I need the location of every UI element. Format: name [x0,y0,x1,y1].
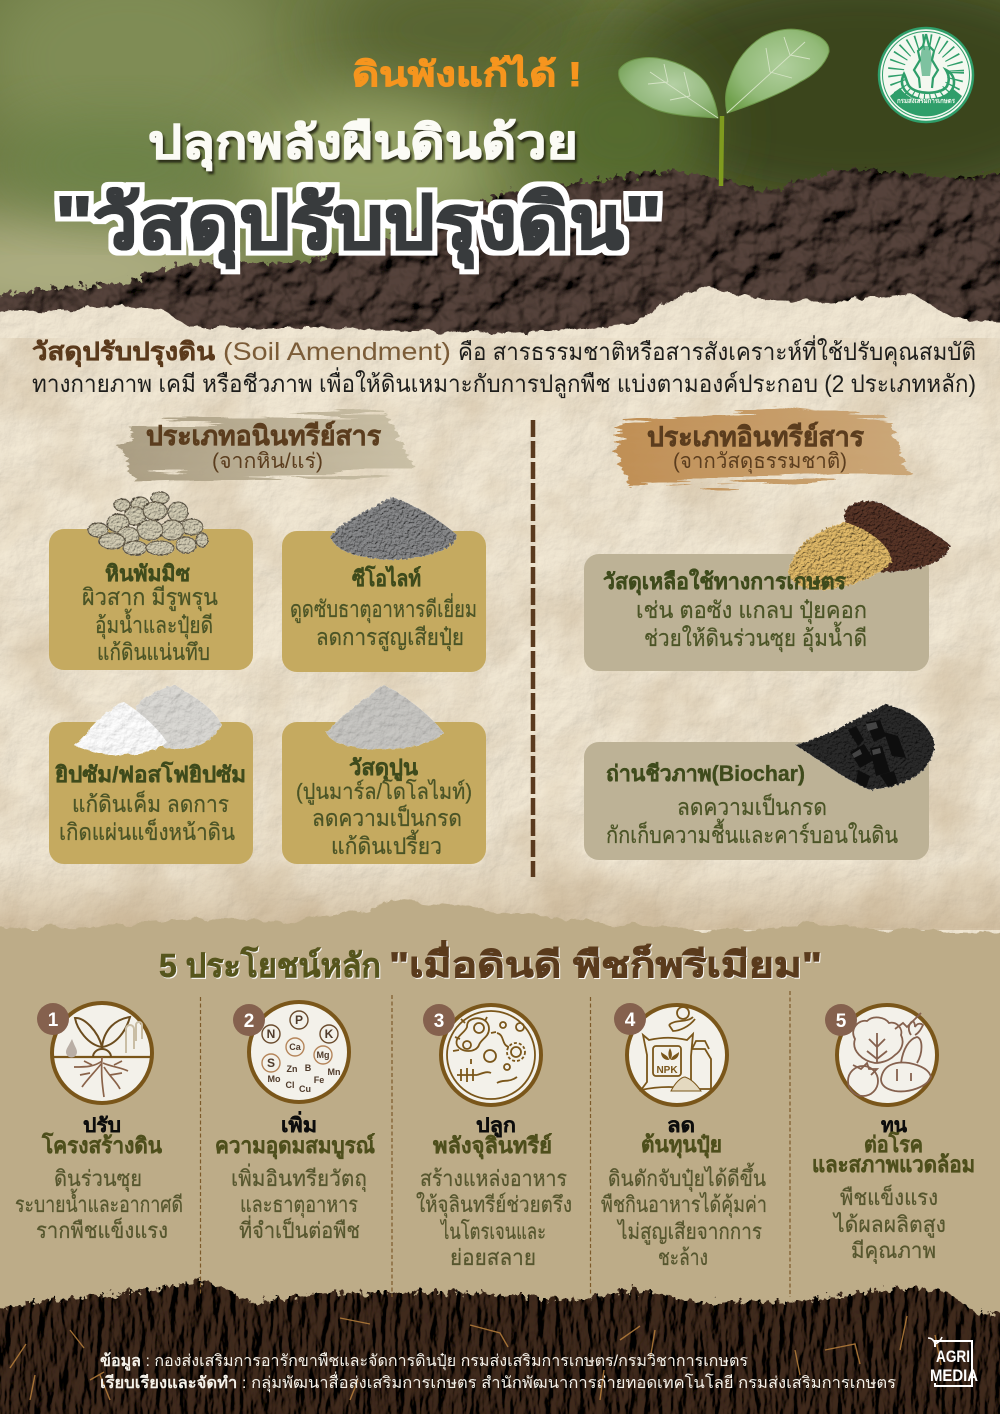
benefit 1: โครงสร้างดิน [41,1132,162,1158]
benefit 1: ดินร่วนซุย [54,1166,142,1192]
icon: soil nutrients: Ca [289,1042,302,1052]
benefit 4: ชะล้าง [658,1245,708,1270]
benefit 3: ให้จุลินทรีย์ช่วยตรึง [416,1192,572,1218]
label: เพิ่ม [281,1110,317,1137]
paper lower wash [0,860,1000,930]
icon: soil nutrients: P [295,1013,303,1027]
panel: inorganic header: (จากหิน/แร่) [212,450,323,473]
icon: soil nutrients: Zn [286,1064,298,1074]
benefit 3: พลังจุลินทรีย์ [433,1133,552,1160]
icon: soil microbes [441,1005,541,1105]
card: lime [282,685,486,864]
icon: soil nutrients: Cu [299,1084,311,1094]
icon: soil nutrients: K [325,1027,334,1041]
icon: NPK fertiliser bag [627,1005,727,1105]
card: pumice [49,492,253,670]
card: gypsum [49,685,253,864]
card: biochar [584,704,935,860]
benefit 4: ต้นทุนปุ๋ย [641,1132,722,1159]
icon: healthy vegetables [837,1005,937,1105]
card: gypsum: แก้ดินเค็ม ลดการ [72,789,229,817]
card: gypsum: เกิดแผ่นแข็งหน้าดิน [59,817,235,845]
benefit 3 [416,1004,572,1270]
card: lime: แก้ดินเปรี้ยว [331,830,442,859]
benefit 5: ต่อโรค [864,1131,923,1157]
right leaf [726,29,829,113]
panel: paper background [0,287,1000,935]
benefit 4: พืชกินอาหารได้คุ้มค่า [601,1192,767,1218]
card: pumice: อุ้มน้ำและปุ๋ยดี [95,609,213,639]
badge: 5 [836,1011,847,1032]
benefit 5 [812,1004,975,1264]
label: ทน [881,1115,907,1137]
icon: zeolite pile [330,497,457,560]
label: ซีโอไลท์ [352,565,421,591]
panel: soil footer [0,1280,1000,1414]
icon: soil nutrients: N [267,1027,275,1041]
benefit 5: และสภาพแวดล้อม [812,1152,975,1177]
icon: soil nutrients: B [305,1063,312,1073]
panel: inorganic header [122,412,410,482]
benefit 5: มีคุณภาพ [851,1238,936,1264]
label: วัสดุปูน [349,755,418,782]
label: วัสดุเหลือใช้ทางการเกษตร [603,568,846,596]
badge: 1 [48,1010,59,1031]
benefit 1: ระบายน้ำและอากาศดี [15,1189,183,1217]
icon: soil nutrients: S [267,1056,275,1070]
icon: department seal [879,28,973,122]
badge [423,1004,455,1036]
logo: Agri Media: AGRI [936,1347,970,1366]
heading: benefits: 5 ประโยชน์หลัก [159,946,381,984]
benefit 2 [215,1002,375,1243]
title: white line: ปลุกพลังผืนดินด้วย [148,116,578,171]
soil footer fibres [10,1316,941,1400]
heading: benefits [159,940,822,985]
footer credits [100,1352,896,1393]
soil mound [0,168,1000,345]
divider [531,420,535,877]
icon: gypsum piles [74,685,222,755]
icon: lime pile [326,685,444,749]
badge [37,1003,69,1035]
panel: organic header: (จากวัสดุธรรมชาติ) [673,450,847,474]
badge: 4 [625,1010,636,1031]
card: agricultural residues: ช่วยให้ดินร่วนซุย อุ้มน้ำดี [644,622,867,652]
icon: pumice stones [88,492,208,555]
benefit 1: รากพืชแข็งแรง [36,1216,168,1243]
icon: soil nutrients: Mo [268,1074,281,1084]
benefit 3: สร้างแหล่งอาหาร [420,1166,567,1191]
card: agricultural residues [584,501,950,671]
benefit 2: ความอุดมสมบูรณ์ [215,1133,375,1160]
text block: definition: คือ สารธรรมชาติหรือสารสังเคราะห์ที่ใช้ปรับคุณสมบัติ [458,335,976,367]
benefit 4 [601,1003,767,1270]
card: biochar: กักเก็บความชื้นและคาร์บอนในดิน [606,819,898,848]
panel: organic header [615,408,905,488]
icon: soil nutrients [249,1002,349,1102]
card: zeolite: ดูดซับธาตุอาหารดีเยี่ยม [290,593,477,623]
card: lime: (ปูนมาร์ล/โดโลไมท์) [296,779,472,805]
logo: Agri Media: MEDIA [930,1366,978,1385]
badge [825,1004,857,1036]
card: biochar: ลดความเป็นกรด [677,792,827,820]
badge [233,1004,265,1036]
benefit 4: ไม่สูญเสียจากการ [616,1219,762,1245]
icon: NPK fertiliser bag: NPK [656,1065,678,1076]
panel: organic header: ประเภทอินทรีย์สาร [647,421,864,452]
benefit 5: ได้ผลผลิตสูง [832,1212,946,1238]
card: agricultural residues: เช่น ตอซัง แกลบ ปุ๋ยคอก [636,597,867,624]
icon: soil nutrients: Fe [314,1075,324,1085]
text block: definition: วัสดุปรับปรุงดิน [32,338,215,368]
icon: biochar pile [795,704,935,790]
label: ปรับ [83,1115,121,1137]
icon: department seal: กรมส่งเสริมการเกษตร [897,97,955,105]
icon: soil nutrients: Mn [328,1067,340,1077]
footer credits: ข้อมูล : กองส่งเสริมการอารักขาพืชและจัดการดินปุ๋ย กรมส่งเสริมการเกษตร/กรมวิชาการเกษตร [100,1352,748,1372]
card: zeolite: ลดการสูญเสียปุ๋ย [316,624,464,651]
text block: definition: (Soil Amendment) [223,338,451,366]
text block: definition [32,335,976,399]
card: zeolite [282,497,486,672]
benefit 2: ที่จำเป็นต่อพืช [239,1215,360,1243]
badge: 2 [244,1011,254,1032]
left leaf [619,58,718,118]
benefit 1 [15,1003,183,1243]
title: orange line: ดินพังแก้ได้ ! [352,54,582,94]
panel: tan benefits background [0,900,1000,1330]
label: ยิปซัม/ฟอสโฟยิปซัม [55,761,246,787]
panel: inorganic header: ประเภทอนินทรีย์สาร [146,420,381,451]
label: ลด [667,1115,695,1137]
panel: hero photo background [0,0,1000,345]
card: pumice: แก้ดินแน่นทึบ [97,639,210,665]
benefit 5: พืชแข็งแรง [840,1183,938,1210]
title: main outlined line: "วัสดุปรับปรุงดิน" [55,181,662,269]
benefit 3: ไนโตรเจนและ [439,1219,546,1244]
card: lime: ลดความเป็นกรด [312,803,462,831]
card: pumice: ผิวสาก มีรูพรุน [82,584,218,611]
heading: benefits: "เมื่อดินดี พืชก็พรีเมียม" [389,940,822,985]
label: ปลูก [476,1115,516,1139]
benefit 2: เพิ่มอินทรียวัตถุ [231,1163,367,1192]
benefit 3: ย่อยสลาย [450,1245,536,1270]
icon: soil nutrients: Mg [316,1050,330,1060]
benefit 4: ดินดักจับปุ๋ยได้ดีขึ้น [608,1163,766,1192]
badge: 3 [434,1011,444,1032]
badge [614,1003,646,1035]
icon: plant and roots [52,1003,152,1103]
paper stains [0,338,1000,928]
benefit 2: และธาตุอาหาร [240,1192,358,1218]
label: หินพัมมิซ [105,561,190,586]
footer credits: เรียบเรียงและจัดทำ : กลุ่มพัฒนาสื่อส่งเสริมการเกษตร สำนักพัฒนาการถ่ายทอดเทคโนโลยี กรมส่งเสริมการเกษตร [100,1371,896,1393]
icon: seedling [619,29,829,186]
icon: soil nutrients: Cl [286,1080,294,1090]
label: ถ่านชีวภาพ(Biochar) [606,761,805,786]
logo: Agri Media [928,1337,978,1386]
icon: compost and straw [788,501,950,590]
